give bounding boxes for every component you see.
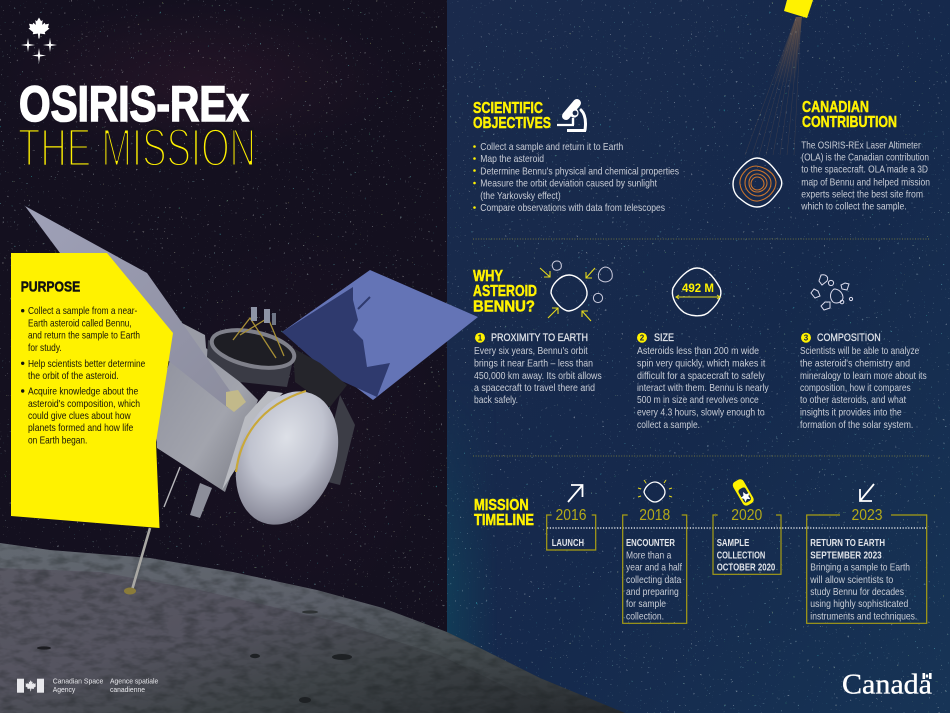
text: proximity [474,345,602,406]
text: return to Earth: instruments and techniques. [810,610,917,622]
label: sample collection [717,537,775,574]
heading: proximity to Earth: PROXIMITY TO EARTH [491,332,588,344]
text: return to Earth: SEPTEMBER 2023 [810,549,882,561]
text: Canadian contribution: The OSIRIS-REx Laser Altimeter [801,140,921,152]
text: objectives list: Compare observations with data from telescopes [480,202,665,214]
asteroid Bennu surface [0,540,630,713]
logo: Canadian Space Agency: Canadian Space [53,677,103,686]
heading: mission timeline: TIMELINE [474,512,534,529]
title block [18,76,256,178]
text: composition: composition, how it compares [800,382,911,394]
text: purpose bullets: and return the sample to Earth [28,330,140,342]
text: size: 500 m in size and revolves once [637,394,759,406]
heading: purpose: PURPOSE [21,279,80,296]
text: composition: formation of the solar system. [800,419,913,431]
year 2020: 2020 [731,507,762,524]
text: proximity: back safely. [474,394,518,406]
title: OSIRIS-REx: OSIRIS-REx [19,76,249,132]
number badge 1: 1 [478,334,483,343]
number badge 2: 2 [640,334,645,343]
text: purpose bullets: asteroid's composition, which [28,398,140,410]
year 2023: 2023 [852,507,883,524]
main dish dome [217,376,357,540]
icon: sample tube [731,478,755,507]
box 2020 [713,515,781,574]
text: composition [800,345,927,431]
text: size: every 4.3 hours, slowly enough to [637,406,765,418]
text: proximity: Every six years, Bennu's orbit [474,345,588,357]
text: return to Earth: using highly sophisticated [810,598,908,610]
logo: Canadian Space Agency [17,677,158,694]
timeline: 2023 return to Earth [807,484,927,623]
wing hinge [226,390,246,412]
icon: maple leaf and stars logo [21,18,57,63]
timeline: 2018 encounter [623,480,687,623]
upper body detail [180,322,228,388]
fin under body [190,483,212,518]
text: objectives list: Collect a sample and return it to Earth [480,141,623,153]
text: proximity: 450,000 km away. Its orbit allows [474,370,602,382]
text: size: Asteroids less than 200 m wide [637,345,759,357]
text: purpose bullets: could give clues about how [28,410,131,422]
timeline: 2020 sample collection [713,478,781,574]
text: return to Earth: RETURN TO EARTH [810,537,885,549]
heading: Canadian contribution [802,99,897,131]
label: launch: LAUNCH [552,537,584,549]
logo: Canadian Space Agency: Agency [53,685,76,694]
heading: scientific objectives: OBJECTIVES [473,115,551,132]
spacecraft illustration [25,206,478,594]
panel: purpose [11,253,173,528]
solar panel: left wing [25,206,235,408]
subtitle: THE MISSION: THE MISSION [18,118,256,178]
text: purpose bullets: for study. [28,342,62,354]
item 2: size [637,332,769,431]
heading: mission timeline: MISSION [474,497,529,514]
text: purpose bullets: on Earth began. [28,434,87,446]
text: encounter [626,537,682,622]
icon: asteroid with approaching arrows [540,261,612,321]
text: purpose bullets: planets formed and how life [28,422,133,434]
instrument deck [207,307,298,387]
text: Canadian contribution: which to collect the sample. [800,200,907,212]
logo: Canada wordmark: Canada [842,669,933,700]
text: return to Earth: study Bennu for decades [810,586,904,598]
text: purpose bullets: the orbit of the asteroid. [28,370,119,382]
icon: asteroid contour map [733,158,782,207]
heading: why asteroid Bennu: BENNU? [473,298,535,316]
year 2016: 2016 [556,507,587,524]
timeline: 2016 launch [547,485,596,550]
right side shadow panel [320,395,355,485]
solar panel: right wing [282,270,478,400]
item 3: composition [800,332,927,431]
heading: why asteroid Bennu: ASTEROID [473,283,537,300]
text: encounter: year and a half [626,562,682,574]
number badge 3: 3 [804,334,809,343]
text: composition: insights it provides into the [800,406,902,418]
foil strip [222,391,283,490]
text: size: interact with them. Bennu is nearly [637,382,769,394]
background: right navy panel [447,0,950,713]
text: purpose bullets: Earth asteroid called Bennu, [28,318,132,330]
icon: OLA laser beam from instrument [745,0,813,155]
text: encounter: collection. [626,610,664,622]
text: composition: to other asteroids, and what [800,394,906,406]
text: return to Earth: will allow scientists to [809,574,893,586]
text: encounter: More than a [626,549,671,561]
text: return to Earth: Bringing a sample to Earth [810,562,910,574]
heading: Canadian contribution: CONTRIBUTION [802,114,897,131]
icon: asteroid size 492 m [672,268,721,316]
text: proximity: a spacecraft to travel there and [474,382,595,394]
text: encounter: for sample [626,598,666,610]
item 1: proximity to Earth [474,332,602,406]
box 2016 [547,515,596,550]
logo: Canadian Space Agency: canadienne [110,685,145,694]
text: encounter: ENCOUNTER [626,537,675,549]
text: objectives list: Determine Bennu's physical and chemical properties [480,166,679,178]
icon: arrow up-right [568,485,582,502]
text: objectives list: Map the asteroid [480,153,544,165]
text: size: difficult for a spacecraft to safely [637,370,765,382]
text: purpose bullets: Acquire knowledge about the [28,386,138,398]
text: encounter: and preparing [626,586,679,598]
icon: arrow down-left [860,484,874,501]
label: sample collection: SAMPLE [717,537,749,549]
text: size: collect a sample. [637,419,700,431]
text: purpose bullets: Help scientists better determine [28,358,145,370]
heading: composition: COMPOSITION [817,332,881,344]
text: return to Earth [809,537,917,622]
text: size [637,345,769,431]
text: objectives list: (the Yarkovsky effect) [480,190,561,202]
arm to right wing [293,348,347,407]
heading: mission timeline [474,497,534,529]
timeline dotted line [547,527,927,529]
text: size: spin very quickly, which makes it [637,358,765,370]
icon: asteroid with rays [638,480,672,502]
heading: why asteroid Bennu [473,268,537,316]
text: composition: the asteroid's chemistry and [800,358,910,370]
icon: microscope [557,103,586,130]
spacecraft boom arm to surface [124,467,180,594]
heading: why asteroid Bennu: WHY [473,268,503,285]
text: encounter: collecting data [626,574,681,586]
icon: asteroid size 492 m: 492 M [682,281,714,295]
label: sample collection: OCTOBER 2020 [717,562,775,574]
icon: asteroid composition fragments [811,275,853,310]
heading: scientific objectives [473,100,551,132]
text: proximity: brings it near Earth – less than [474,358,593,370]
heading: size: SIZE [654,332,674,344]
text: Canadian contribution: experts select the best site from [801,188,923,200]
background: left starfield panel [0,0,447,713]
logo: Canadian Space Agency: Agence spatiale [110,677,158,686]
main body cylinder [155,325,258,492]
text: purpose bullets [21,305,145,446]
text: purpose bullets: Collect a sample from a near- [28,305,138,317]
gold rim on dish edge [236,391,306,472]
year 2018: 2018 [639,507,670,524]
heading: Canadian contribution: CANADIAN [802,99,869,116]
label: sample collection: COLLECTION [717,549,765,561]
box 2023 [807,515,927,623]
heading: scientific objectives: SCIENTIFIC [473,100,543,117]
box 2018 [623,515,687,623]
text: objectives list [473,141,679,214]
text: composition: Scientists will be able to analyze [800,345,919,357]
text: Canadian contribution [800,140,930,212]
text: objectives list: Measure the orbit deviation caused by sunlight [480,178,657,190]
